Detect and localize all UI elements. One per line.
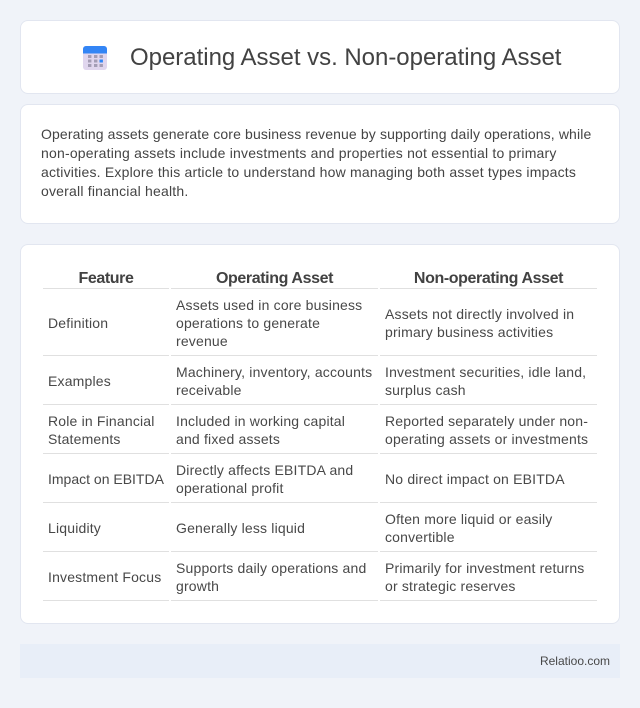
row: investment focus xyxy=(48,560,584,594)
row: role in financial statements: and fixed assets xyxy=(176,431,280,447)
row: role in financial statements: Role in Financial xyxy=(48,413,155,429)
icon: calendar xyxy=(83,46,107,70)
row: investment focus: or strategic reserves xyxy=(385,578,516,594)
table header: Feature xyxy=(78,270,134,286)
row: role in financial statements xyxy=(48,413,588,447)
table header: Non-operating Asset xyxy=(414,270,563,286)
row: definition: primary business activities xyxy=(385,324,553,340)
title: Operating Asset vs. Non-operating Asset xyxy=(130,44,561,71)
intro text: Operating assets generate core business revenue by supporting daily operations, while xyxy=(41,126,591,142)
row: role in financial statements: Included in working capital xyxy=(176,413,345,429)
row: definition xyxy=(48,297,574,349)
row: definition: Assets used in core business xyxy=(176,297,362,313)
row: impact on EBITDA: operational profit xyxy=(176,480,284,496)
row: investment focus: growth xyxy=(176,578,219,594)
row: impact on EBITDA: No direct impact on EBITDA xyxy=(385,471,565,487)
row: impact on EBITDA: Impact on EBITDA xyxy=(48,471,164,487)
panel: introduction xyxy=(20,104,620,224)
row: definition: operations to generate xyxy=(176,315,320,331)
row: impact on EBITDA: Directly affects EBITDA and xyxy=(176,462,353,478)
row: examples: Investment securities, idle land, xyxy=(385,364,586,380)
row: examples xyxy=(48,364,586,398)
row: examples: Examples xyxy=(48,373,111,389)
row: examples: Machinery, inventory, accounts xyxy=(176,364,372,380)
row: examples: receivable xyxy=(176,382,242,398)
row: definition: revenue xyxy=(176,333,228,349)
row: investment focus: Supports daily operations and xyxy=(176,560,366,576)
panel: comparison table xyxy=(20,244,620,624)
row: investment focus: Primarily for investment returns xyxy=(385,560,584,576)
intro text xyxy=(41,126,591,199)
row: liquidity: convertible xyxy=(385,529,455,545)
row: role in financial statements: operating assets or investments xyxy=(385,431,588,447)
row: examples: surplus cash xyxy=(385,382,466,398)
intro text: non-operating assets include investments and properties not essential to primary xyxy=(41,145,557,161)
row: role in financial statements: Reported separately under non- xyxy=(385,413,588,429)
row: definition: Definition xyxy=(48,315,108,331)
row: liquidity: Generally less liquid xyxy=(176,520,305,536)
row: role in financial statements: Statements xyxy=(48,431,121,447)
row: definition: Assets not directly involved in xyxy=(385,306,574,322)
row: investment focus: Investment Focus xyxy=(48,569,161,585)
table header: Operating Asset xyxy=(216,270,333,286)
panel: title card xyxy=(20,20,620,94)
footer text: Relatioo.com xyxy=(540,654,610,668)
comparison table xyxy=(43,270,597,601)
row: liquidity: Often more liquid or easily xyxy=(385,511,552,527)
row: liquidity xyxy=(48,511,552,545)
intro text: activities. Explore this article to understand how managing both asset types impacts xyxy=(41,164,576,180)
row: impact on EBITDA xyxy=(48,462,565,496)
row: liquidity: Liquidity xyxy=(48,520,101,536)
footer bar xyxy=(20,644,620,678)
intro text: overall financial health. xyxy=(41,183,188,199)
table header xyxy=(78,270,564,286)
